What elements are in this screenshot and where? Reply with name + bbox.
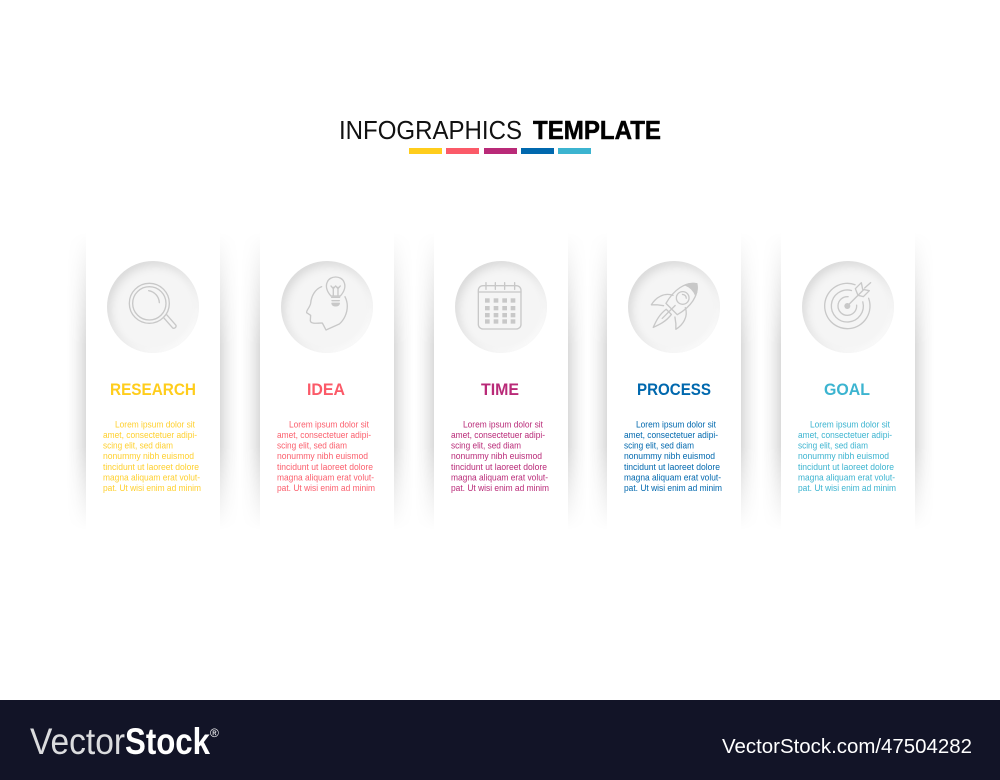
- text block: research: magna aliquam erat volut-: [103, 471, 200, 482]
- icon: target with arrow: [825, 283, 871, 329]
- text block: process: tincidunt ut laoreet dolore: [624, 461, 720, 472]
- footer logo: ®: [210, 726, 219, 740]
- text block: research: tincidunt ut laoreet dolore: [103, 461, 199, 472]
- title colour bars: [409, 148, 591, 154]
- text block: process: nonummy nibh euismod: [624, 450, 715, 461]
- panel: process: [607, 232, 741, 530]
- icon: magnifying glass: [129, 283, 176, 328]
- text block: goal: [798, 418, 896, 493]
- text block: goal: scing elit, sed diam: [798, 440, 868, 451]
- footer url: VectorStock.com/47504282: [722, 735, 972, 758]
- panel: goal: [781, 232, 915, 530]
- text block: goal: tincidunt ut laoreet dolore: [798, 461, 894, 472]
- panel: idea: [260, 232, 394, 530]
- panel: time: [434, 232, 568, 530]
- heading: process: PROCESS: [637, 380, 711, 399]
- text block: time: Lorem ipsum dolor sit: [463, 418, 543, 430]
- footer logo: Stock: [125, 721, 210, 762]
- heading: research: RESEARCH: [110, 380, 196, 399]
- text block: process: pat. Ut wisi enim ad minim: [624, 482, 722, 493]
- text block: idea: tincidunt ut laoreet dolore: [277, 461, 373, 472]
- heading: goal: GOAL: [824, 380, 870, 399]
- text block: research: nonummy nibh euismod: [103, 450, 194, 461]
- heading: time: TIME: [481, 380, 519, 399]
- text block: idea: scing elit, sed diam: [277, 440, 347, 451]
- text block: goal: amet, consectetuer adipi-: [798, 429, 892, 440]
- title: TEMPLATE: [533, 117, 661, 145]
- text block: time: magna aliquam erat volut-: [451, 471, 548, 482]
- icon: calendar: [478, 283, 521, 329]
- title: [339, 117, 661, 145]
- text block: process: amet, consectetuer adipi-: [624, 429, 718, 440]
- footer band: [0, 700, 1000, 780]
- text block: process: [624, 418, 722, 493]
- text block: idea: magna aliquam erat volut-: [277, 471, 374, 482]
- text block: time: nonummy nibh euismod: [451, 450, 542, 461]
- text block: process: scing elit, sed diam: [624, 440, 694, 451]
- text block: idea: [277, 418, 375, 493]
- text block: goal: magna aliquam erat volut-: [798, 471, 895, 482]
- text block: idea: nonummy nibh euismod: [277, 450, 368, 461]
- text block: goal: Lorem ipsum dolor sit: [810, 418, 890, 430]
- text block: process: Lorem ipsum dolor sit: [636, 418, 716, 430]
- text block: time: scing elit, sed diam: [451, 440, 521, 451]
- footer logo: [30, 721, 219, 762]
- text block: research: Lorem ipsum dolor sit: [115, 418, 195, 430]
- title: INFOGRAPHICS: [339, 117, 522, 145]
- icon: head with light bulb: [307, 277, 347, 330]
- text block: process: magna aliquam erat volut-: [624, 471, 721, 482]
- text block: research: [103, 418, 201, 493]
- text block: idea: Lorem ipsum dolor sit: [289, 418, 369, 430]
- text block: research: pat. Ut wisi enim ad minim: [103, 482, 201, 493]
- text block: time: pat. Ut wisi enim ad minim: [451, 482, 549, 493]
- heading: idea: IDEA: [307, 380, 345, 399]
- panel: research: [86, 232, 220, 530]
- text block: idea: pat. Ut wisi enim ad minim: [277, 482, 375, 493]
- text block: time: tincidunt ut laoreet dolore: [451, 461, 547, 472]
- text block: goal: pat. Ut wisi enim ad minim: [798, 482, 896, 493]
- footer logo: Vector: [30, 721, 125, 762]
- text block: time: amet, consectetuer adipi-: [451, 429, 545, 440]
- text block: time: [451, 418, 549, 493]
- text block: research: scing elit, sed diam: [103, 440, 173, 451]
- icon: rocket: [640, 271, 710, 340]
- text block: research: amet, consectetuer adipi-: [103, 429, 197, 440]
- text block: idea: amet, consectetuer adipi-: [277, 429, 371, 440]
- text block: goal: nonummy nibh euismod: [798, 450, 889, 461]
